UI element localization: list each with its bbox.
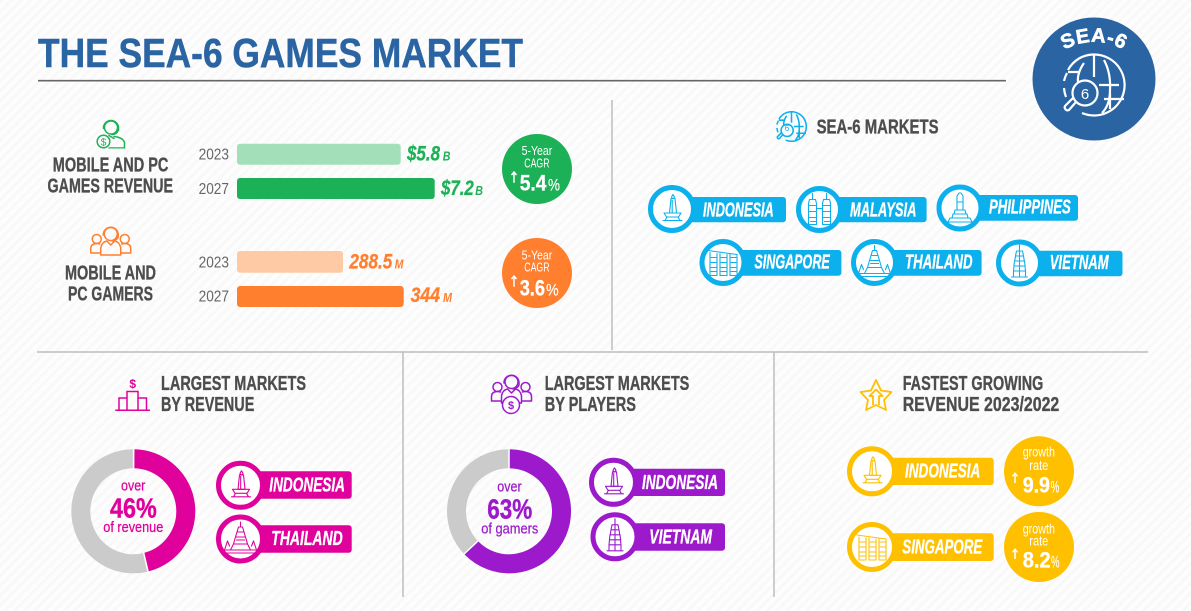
badge: SEA-6: 6 — [1081, 86, 1089, 103]
panel: mobile and PC games revenue — [48, 120, 572, 204]
bar chart: gamers: 288.5 — [349, 250, 393, 273]
callout: Indonesia growth rate: 9.9 — [1023, 472, 1050, 497]
chart: revenue donut: 46% — [110, 492, 157, 523]
pill: Vietnam — [998, 242, 1122, 284]
callout: gamers CAGR: 3.6 — [520, 276, 545, 301]
callout: Singapore growth rate — [1004, 512, 1074, 582]
bar chart: revenue: 2027 — [199, 181, 229, 198]
pill: Indonesia: INDONESIA — [905, 461, 980, 483]
heading: by players: BY PLAYERS — [545, 394, 636, 416]
pill: Singapore: SINGAPORE — [754, 252, 830, 274]
callout: gamers CAGR: % — [546, 281, 559, 300]
callout: gamers CAGR — [502, 238, 572, 308]
pill: Singapore — [702, 242, 841, 284]
callout: revenue CAGR: % — [548, 176, 560, 195]
chart: revenue donut — [81, 449, 186, 572]
callout: Singapore growth rate: % — [1051, 553, 1060, 572]
bar chart: revenue: $7.2 — [440, 177, 474, 200]
pill: Malaysia: MALAYSIA — [850, 200, 916, 222]
heading: gamers: MOBILE AND — [65, 262, 156, 284]
bar chart: revenue: B — [475, 183, 483, 198]
pill: Vietnam — [593, 515, 725, 559]
title: THE SEA-6 GAMES MARKET — [38, 30, 523, 76]
bar chart: revenue: $5.8 — [406, 143, 440, 166]
panel: largest markets by revenue — [81, 373, 352, 572]
pill: Vietnam: VIETNAM — [649, 526, 713, 548]
heading: SEA-6 markets: SEA-6 MARKETS — [817, 116, 939, 138]
callout: Singapore growth rate: rate — [1029, 532, 1048, 548]
callout: Singapore growth rate: 8.2 — [1023, 548, 1051, 573]
icon: players with coin — [492, 375, 532, 414]
pill: Thailand: THAILAND — [905, 252, 972, 274]
pill: Singapore — [850, 524, 994, 570]
bar chart: revenue — [199, 143, 483, 200]
heading: by players: LARGEST MARKETS — [545, 373, 689, 395]
icon: group of gamers — [91, 227, 131, 255]
bar chart: gamers: 344 — [411, 284, 440, 307]
heading: SEA-6 markets: 6 — [785, 124, 790, 133]
pill: Indonesia: INDONESIA — [642, 472, 718, 494]
bar chart: revenue: B — [443, 149, 450, 164]
bar chart: revenue: 2023 — [199, 146, 229, 163]
panel: mobile and PC gamers — [65, 227, 572, 308]
heading: by revenue: BY REVENUE — [161, 394, 254, 416]
callout: Indonesia growth rate — [1004, 436, 1074, 506]
panel: fastest growing revenue — [850, 373, 1074, 582]
pill: Indonesia — [592, 460, 725, 504]
chart: players donut: over — [497, 479, 522, 496]
icon: star with arrow — [860, 380, 892, 410]
bar chart: gamers: 2027 — [199, 289, 229, 306]
chart: revenue donut: of revenue — [103, 519, 163, 536]
pill: Indonesia — [850, 449, 994, 494]
chart: players donut — [456, 449, 562, 564]
panel: SEA-6 markets — [650, 112, 1122, 284]
heading: fastest growing: REVENUE 2023/2022 — [903, 394, 1059, 416]
pill: Vietnam: VIETNAM — [1050, 252, 1110, 274]
pill: Thailand — [854, 242, 982, 284]
chart: players donut: 63% — [487, 493, 532, 524]
pill: Thailand: THAILAND — [271, 528, 343, 550]
heading: games revenue: GAMES REVENUE — [48, 176, 173, 198]
callout: gamers CAGR: CAGR — [524, 260, 550, 275]
bar chart: gamers: 2023 — [199, 255, 229, 272]
chart: players donut: of gamers — [481, 520, 538, 538]
callout: gamers CAGR: 5-Year — [522, 248, 553, 263]
callout: revenue CAGR: 5-Year — [522, 143, 553, 158]
heading: by revenue: LARGEST MARKETS — [161, 373, 306, 395]
pill: Indonesia: INDONESIA — [703, 200, 774, 222]
callout: Indonesia growth rate: growth — [1023, 444, 1055, 460]
callout: revenue CAGR: CAGR — [524, 155, 550, 170]
pill: Philippines — [939, 187, 1078, 229]
pill: Indonesia: INDONESIA — [269, 475, 345, 497]
icon: podium with dollar: $ — [129, 377, 136, 391]
pill: Indonesia — [650, 188, 786, 230]
icon: players with coin: $ — [508, 400, 514, 412]
pill: Thailand — [218, 517, 352, 561]
badge: SEA-6: SEA-6 — [1060, 28, 1127, 48]
pill: Philippines: PHILIPPINES — [989, 197, 1071, 219]
icon: gamer with dollar coin — [97, 120, 124, 148]
heading: games revenue: MOBILE AND PC — [53, 155, 168, 177]
pill: Singapore: SINGAPORE — [902, 537, 983, 559]
heading: gamers: PC GAMERS — [68, 284, 153, 306]
callout: Singapore growth rate: growth — [1023, 520, 1055, 536]
heading: fastest growing: FASTEST GROWING — [903, 373, 1043, 395]
bar chart: gamers: M — [395, 256, 404, 271]
pill: Malaysia — [798, 188, 927, 230]
panel: largest markets by players — [456, 373, 725, 564]
badge: SEA-6 — [1032, 18, 1156, 140]
chart: revenue donut: over — [121, 478, 145, 495]
bar chart: gamers — [199, 250, 453, 307]
callout: Indonesia growth rate: % — [1051, 477, 1059, 496]
icon: podium with dollar — [115, 377, 150, 410]
callout: revenue CAGR: 5.4 — [520, 171, 547, 196]
callout: revenue CAGR — [502, 134, 572, 204]
callout: Indonesia growth rate: rate — [1029, 457, 1048, 473]
bar chart: gamers: M — [443, 290, 453, 305]
pill: Indonesia — [218, 463, 352, 507]
heading: SEA-6 markets — [777, 112, 939, 141]
